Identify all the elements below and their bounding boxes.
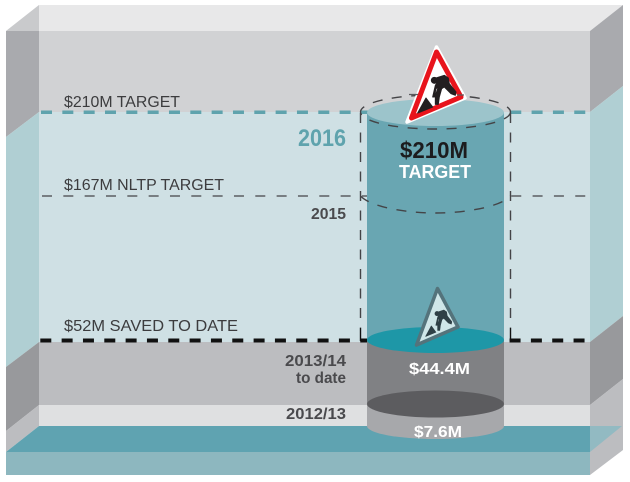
icon: small roadworks sign [416,288,458,345]
labels: $210M TARGET [64,94,180,111]
icon: large roadworks sign [407,47,465,122]
cylinder [367,99,504,439]
labels: 2013/14 [285,353,346,370]
value labels: $210M [400,137,468,163]
labels: 2015 [311,206,346,223]
labels: $167M NLTP TARGET [64,177,224,194]
value labels [399,137,471,441]
labels: 2012/13 [286,406,346,423]
labels [64,94,346,423]
labels: 2016 [298,125,346,152]
value labels: $44.4M [409,361,470,378]
dashed target outline [360,95,510,341]
value labels: $7.6M [414,424,462,441]
value labels: TARGET [399,162,471,182]
labels: to date [296,370,346,387]
labels: $52M SAVED TO DATE [64,318,238,335]
target lines [40,112,590,340]
